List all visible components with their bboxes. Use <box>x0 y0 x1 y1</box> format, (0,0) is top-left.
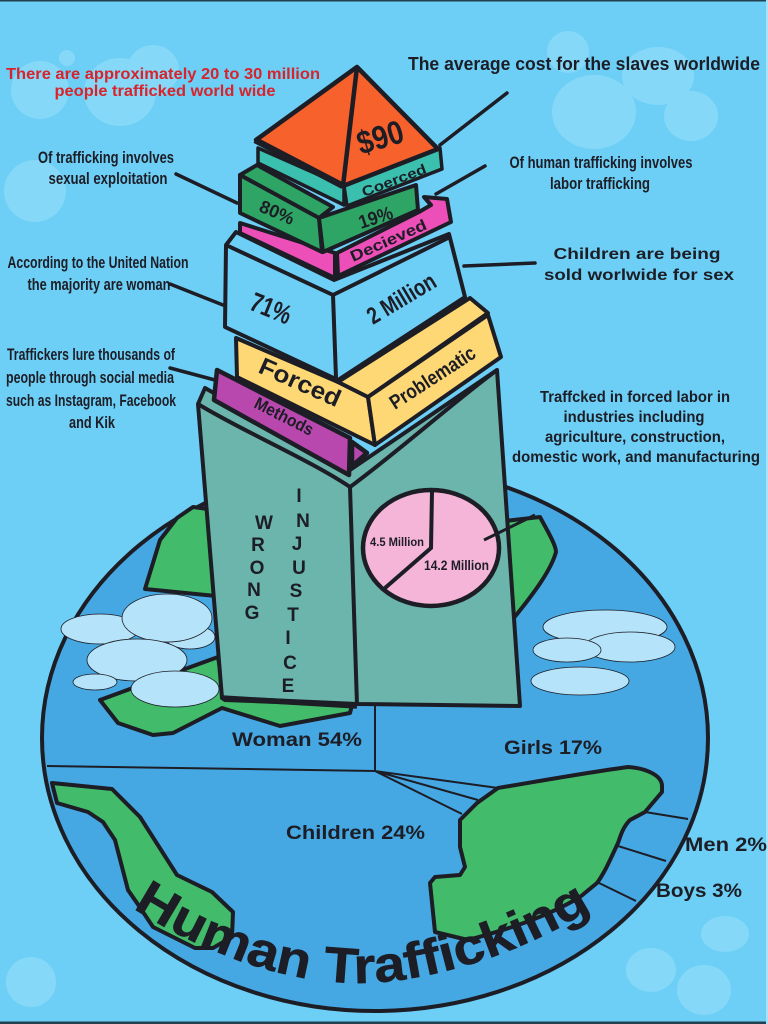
layer: coerced teal book <box>258 148 442 206</box>
callout: majority women: According to the United Nation <box>8 254 188 272</box>
layer: methods purple book: Methods <box>251 394 317 440</box>
callout: social media <box>6 346 177 432</box>
book spine text: injustice <box>282 486 310 697</box>
callout: forced labor industries: agriculture, construction, <box>545 429 725 446</box>
pyramid roof with price: $90 <box>352 113 408 162</box>
book spine text: injustice: C <box>283 653 297 674</box>
callout: trafficked world wide: There are approximately 20 to 30 million <box>6 66 320 83</box>
pie labels on globe: Girls 17% <box>504 738 602 759</box>
layer: methods purple book <box>214 370 367 475</box>
book base: wrong injustice <box>198 370 520 706</box>
clouds: left <box>61 594 219 707</box>
pie labels on globe: Boys 3% <box>656 881 742 902</box>
book spine text: wrong: O <box>250 558 264 579</box>
callout: sexual exploitation: Of trafficking involves <box>38 149 174 167</box>
book spine text: injustice: S <box>290 581 302 602</box>
book spine text: injustice: T <box>287 605 299 626</box>
callout: sexual exploitation <box>38 149 174 188</box>
layer: green book 80% and 19%: 19% <box>356 203 396 234</box>
callout: trafficked world wide <box>6 66 320 100</box>
book spine text: injustice: U <box>292 558 306 579</box>
callout: social media: people through social media <box>6 369 175 387</box>
pie labels on globe: Woman 54% <box>232 730 362 751</box>
clouds: right <box>531 610 675 695</box>
callout: forced labor industries: Traffcked in forced labor in <box>540 389 730 406</box>
book spine text: wrong: W <box>255 513 273 534</box>
pie labels on globe <box>232 730 767 902</box>
callout: sexual exploitation: sexual exploitation <box>48 170 168 188</box>
book spine text: wrong: N <box>247 580 261 601</box>
callout: social media: such as Instagram, Facebook <box>6 392 177 410</box>
layer: forced and problematic yellow book: Forced <box>255 353 345 413</box>
book spine text: wrong: R <box>251 535 265 556</box>
book spine text: wrong <box>245 513 273 624</box>
continent: top left <box>145 507 216 596</box>
continent: right <box>505 517 556 619</box>
pie divider lines <box>47 700 688 901</box>
book spine text: injustice: E <box>282 676 294 697</box>
callout: children sold: Children are being <box>554 246 720 263</box>
callout: labor trafficking <box>510 154 692 193</box>
book spine text: injustice: I <box>285 628 291 649</box>
pie chart: 4.5 Million <box>370 537 424 549</box>
callout: labor trafficking: Of human trafficking involves <box>510 154 692 172</box>
layer: decieved pink book: Decieved <box>348 217 430 266</box>
layer: decieved pink book <box>240 197 451 278</box>
book spine text: injustice: N <box>296 511 310 532</box>
callout: children sold: sold worlwide for sex <box>544 267 734 284</box>
layer: green book 80% and 19%: 80% <box>256 196 297 229</box>
callout: forced labor industries <box>512 389 760 466</box>
pie labels on globe: Men 2% <box>685 835 767 856</box>
callout: trafficked world wide: people trafficked world wide <box>54 83 276 100</box>
callout: social media: and Kik <box>69 414 116 432</box>
layer: light blue box 71% and 2 Million: 2 Million <box>362 268 441 330</box>
layer: coerced teal book: Coerced <box>359 160 429 200</box>
continent: lower left <box>100 657 352 735</box>
callout: majority women: the majority are woman <box>28 276 170 294</box>
book spine text: wrong: G <box>245 603 259 624</box>
callout: forced labor industries: industries including <box>564 409 704 426</box>
layer: forced and problematic yellow book: Problematic <box>386 342 480 414</box>
book spine text: injustice: I <box>296 486 302 507</box>
book spine text: injustice: J <box>292 534 302 555</box>
pyramid roof with price <box>255 67 438 186</box>
title: human trafficking: Human Trafficking <box>136 880 590 984</box>
continent: bottom right <box>430 767 662 940</box>
globe <box>42 465 708 1011</box>
leader lines <box>170 93 535 380</box>
callout: children sold <box>544 246 734 284</box>
layer: green book 80% and 19% <box>240 165 418 252</box>
layer: forced and problematic yellow book <box>236 298 501 445</box>
layer: light blue box 71% and 2 Million: 71% <box>246 287 296 330</box>
pie labels on globe: Children 24% <box>286 823 425 844</box>
callout: majority women <box>8 254 188 294</box>
pie chart: 14.2 Million <box>424 558 489 573</box>
callout: social media: Traffickers lure thousands of <box>7 346 175 364</box>
callout: labor trafficking: labor trafficking <box>550 175 650 193</box>
pie chart <box>363 490 535 606</box>
continent: bottom left <box>52 783 233 948</box>
layer: light blue box 71% and 2 Million <box>225 232 465 380</box>
